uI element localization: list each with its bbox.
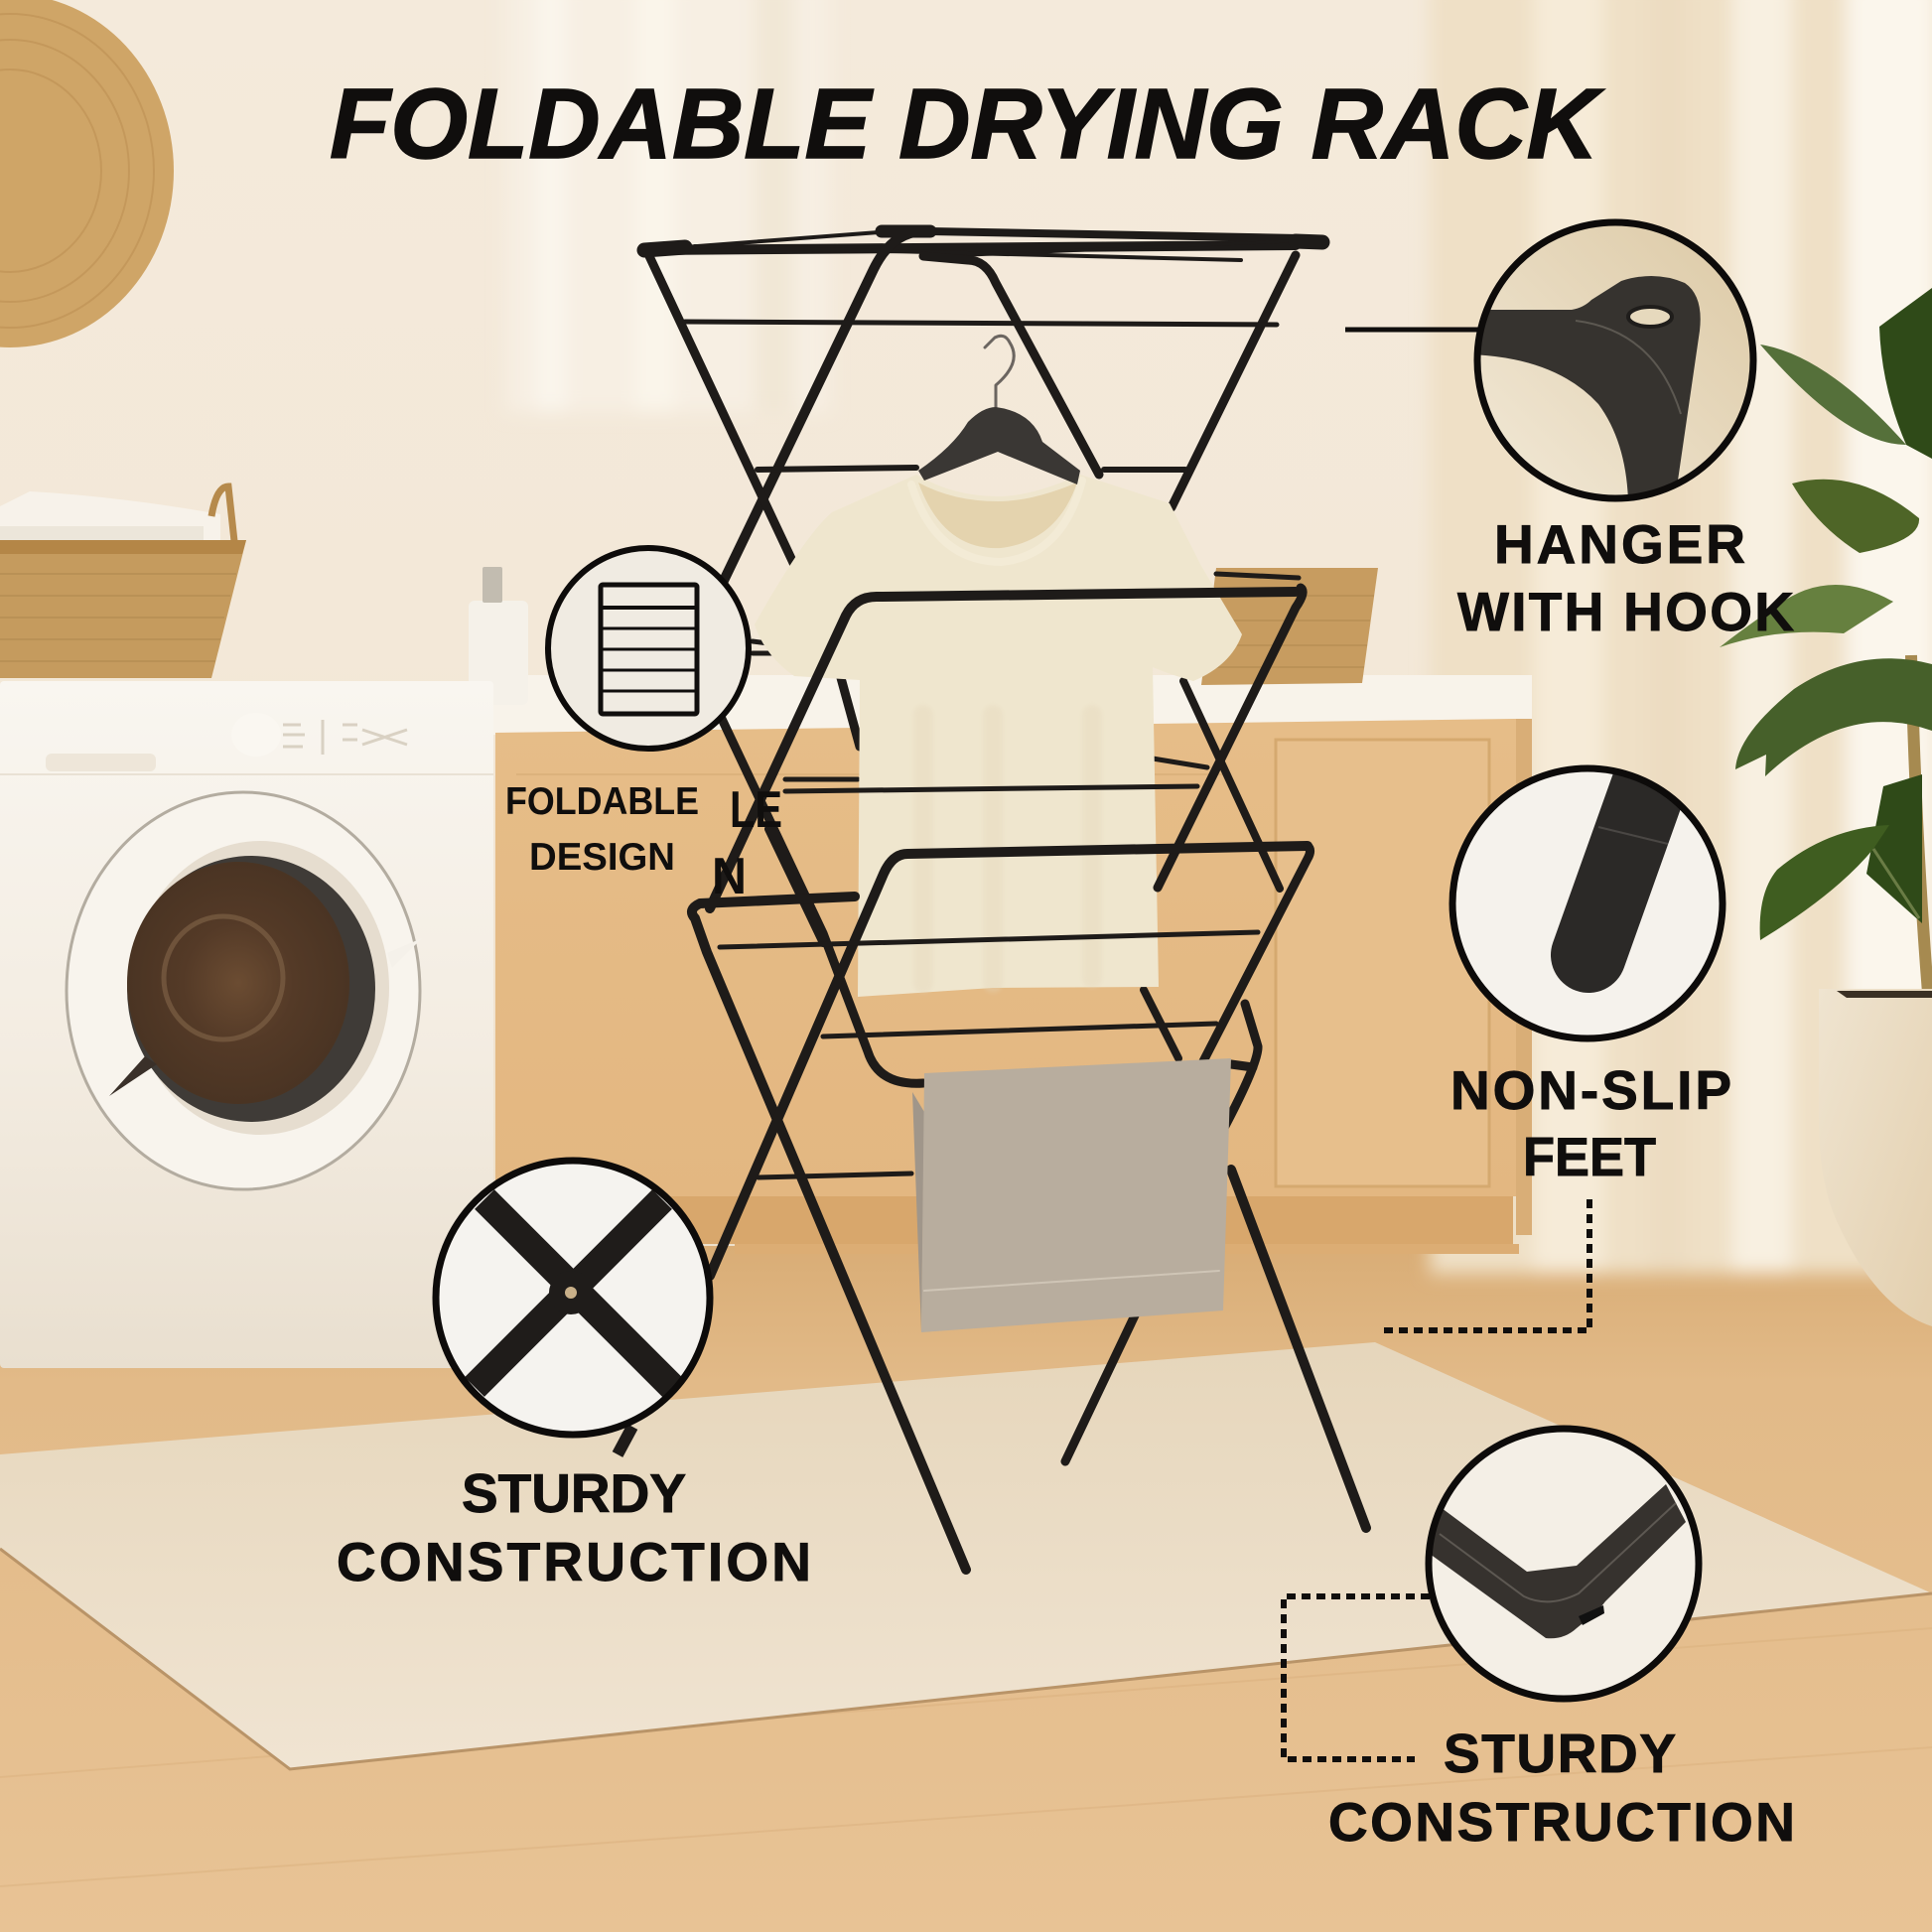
trunk [1911, 655, 1928, 993]
wood planks [0, 1628, 1932, 1886]
label: sturdy construction: CONSTRUCTION [337, 1531, 811, 1592]
bottle [469, 567, 528, 705]
leg stub [618, 1427, 632, 1454]
wall basket [0, 0, 174, 347]
washing machine [0, 681, 493, 1368]
callout: sturdy construction, left [337, 1161, 811, 1592]
t-shirt [755, 475, 1242, 997]
middle frame of rack [710, 588, 1303, 943]
dotted leader [1284, 1596, 1430, 1759]
label: non-slip feet [1450, 1059, 1731, 1187]
callout: non-slip feet [1380, 755, 1731, 1330]
stray letters [712, 781, 782, 905]
label: foldable design: DESIGN [529, 836, 675, 879]
label: foldable design [505, 780, 699, 879]
label: sturdy construction [1328, 1723, 1795, 1853]
label: hanger with hook: WITH HOOK [1457, 581, 1794, 642]
drying rack [644, 231, 1366, 1570]
right curtains [1430, 0, 1932, 1274]
callout: foldable design [505, 548, 782, 905]
label: hanger with hook: HANGER [1494, 513, 1745, 575]
label: sturdy construction [337, 1462, 811, 1592]
back curtain [506, 0, 829, 412]
right basket [1201, 568, 1378, 685]
detail circle: hanger end [1469, 222, 1753, 501]
cabinet [495, 719, 1532, 1254]
plant [1720, 288, 1932, 1326]
label: foldable design: FOLDABLE [505, 780, 699, 823]
detail circle: cross joint [436, 1161, 710, 1435]
leaves [1879, 288, 1932, 459]
stray letters: N [712, 848, 747, 905]
front frame of rack [692, 846, 1366, 1570]
label: non-slip feet: FEET [1523, 1126, 1656, 1187]
dotted leader [1380, 1199, 1589, 1330]
hanger [918, 336, 1080, 484]
floor [0, 1246, 1932, 1932]
detail circle: rubber foot [1452, 755, 1723, 1038]
left basket with towels [0, 486, 246, 678]
label: sturdy construction: STURDY [1444, 1723, 1676, 1784]
leader line [1345, 328, 1479, 332]
callout: sturdy construction, right [1284, 1429, 1795, 1853]
label: hanger with hook [1457, 513, 1794, 642]
counter [493, 675, 1532, 735]
pot [1819, 989, 1932, 1326]
wall [0, 0, 1932, 1291]
back frame of rack [644, 231, 1322, 1083]
title: FOLDABLE DRYING RACK [330, 69, 1605, 180]
detail circle: folded rack [548, 548, 749, 749]
label: sturdy construction: CONSTRUCTION [1328, 1791, 1795, 1853]
stray letters: LE [730, 781, 782, 839]
label: non-slip feet: NON-SLIP [1450, 1059, 1731, 1121]
detail circle: corner elbow [1429, 1429, 1699, 1699]
label: sturdy construction: STURDY [462, 1462, 686, 1524]
callout: hanger with hook [1345, 222, 1794, 642]
rug [0, 1342, 1932, 1769]
towel [912, 1058, 1231, 1332]
